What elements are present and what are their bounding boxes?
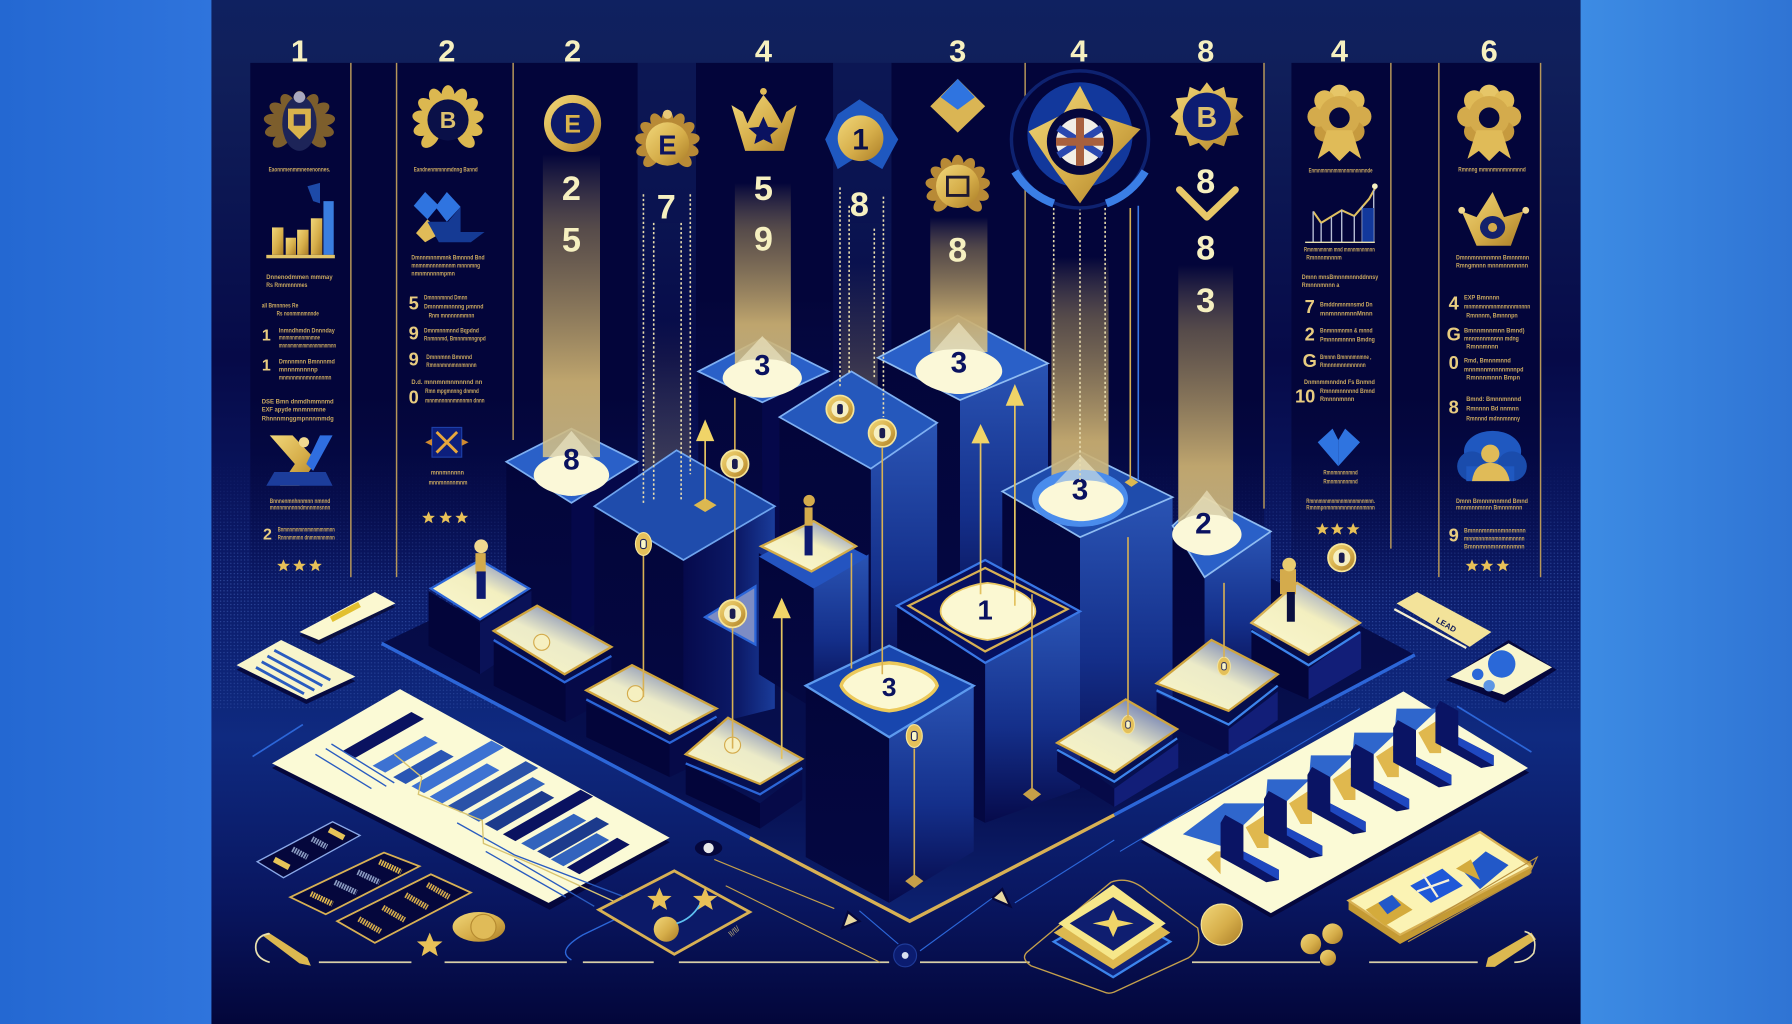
pillar: number 1: [897, 560, 1080, 823]
medal: gold laurel: [411, 85, 485, 151]
text block: Dnnenodmmen mmmay: [266, 274, 333, 281]
top row numbers: 4: [755, 34, 772, 69]
small cards upper right: [1394, 592, 1557, 703]
floor platform: [382, 389, 1415, 921]
text block: [262, 166, 336, 543]
medal: gold rosette: [1457, 85, 1521, 161]
text block: mnmnmnnmnmnmnnmnnnn: [1464, 304, 1530, 311]
text block: mnnmnnmnnnnmnnpd: [1464, 366, 1523, 373]
text block: Rmnnnd mdnnmnnny: [1466, 416, 1520, 423]
bottom baseline segments: [319, 961, 1478, 963]
text block: Rmnmnnnnmnd: [1323, 478, 1358, 485]
text block: Eandnenmmnnmdnng Bannd: [414, 166, 478, 173]
pillar: small triangle step behind arrow: [705, 586, 755, 645]
white number caps on platforms: 8: [563, 444, 580, 477]
text block: 7: [1305, 296, 1315, 317]
bottom-left pencil, star and coin: [256, 912, 505, 966]
top row numbers: 6: [1481, 34, 1498, 69]
bottom-left list cards: [257, 822, 471, 943]
icon: crown with heart: [1458, 192, 1529, 246]
text block: 2: [1305, 324, 1315, 345]
right ascending steps: [1057, 558, 1361, 807]
icon: bar chart: [266, 183, 335, 258]
bottom-centre stacked badge: [1025, 880, 1242, 993]
rating stars: [277, 559, 322, 571]
text block: 0: [1449, 352, 1459, 373]
text block: Bmnd: Bmnnmnnnd: [1466, 396, 1521, 403]
rating stars: [422, 511, 468, 523]
text block: Rmnnnmnnn: [1320, 396, 1354, 403]
text block: Dmnn mnsBmnnmnnnddnnsy: [1302, 274, 1378, 281]
text block: Dnmnmmnndnd Fs Bnmnd: [1304, 379, 1375, 386]
text block: Rmnnmnnnnnd Bmnd: [1320, 388, 1375, 395]
text block: Rnmnnmd, Bmnnmmngnpd: [424, 336, 486, 343]
text block: EXP Bmnnnn: [1464, 294, 1499, 301]
text block: all Bmnnnes Re: [262, 302, 298, 309]
dark column strips: [250, 63, 1541, 600]
text block: Rmd, Bmnnmnnd: [1464, 357, 1511, 364]
medal: sunburst B: [1170, 82, 1243, 151]
bottom-centre star card: ll/ll/: [727, 924, 742, 939]
gold connector lines and markers: [643, 206, 1224, 888]
column 2 content: [409, 85, 486, 523]
chart paper: bars: [253, 689, 670, 910]
text block: Rmnnnmnnmnnmnnnn: [426, 362, 477, 369]
medal: laurel E: [634, 110, 701, 170]
text block: mnnnmnnnnp: [279, 366, 318, 373]
text block: 2: [263, 526, 272, 543]
text block: 5: [409, 293, 419, 314]
gold light beams with numbers: 9: [754, 220, 773, 258]
text block: Dmnnmnn Bmnnnd: [426, 354, 472, 361]
text block: Eaonnmenmmnenenonnes.: [269, 166, 330, 173]
text block: Rmnnnmnnn Bmpn: [1466, 374, 1520, 381]
text block: mnnnmnnmmmnnnmmnmnn: [279, 342, 336, 349]
column 3-4 medals: [544, 71, 1243, 217]
text block: [1295, 168, 1378, 512]
coins on connectors: [635, 395, 1355, 747]
text block: Dmnnmnnmnmnn Bmnnmnn: [1456, 254, 1529, 261]
text block: mnnmnnmnnn Bmnnmnnn: [1456, 505, 1522, 512]
text block: Pmnnnmnnnn Bmdng: [1320, 337, 1375, 344]
text block: Inmndhmdn Dnnnday: [279, 328, 335, 335]
medal: Union flag star: [1011, 71, 1149, 208]
text block: mnnmnnnnnmnnnmn dnnn: [425, 397, 485, 404]
gold light beams with numbers: 2: [562, 170, 581, 208]
text block: 9: [409, 322, 419, 343]
bottom-centre star card: [566, 871, 750, 960]
text block: mnmnnnmnnMnnn: [1320, 310, 1373, 317]
rating stars: [1316, 523, 1360, 535]
pillar: lower number 3: 3: [882, 672, 896, 702]
text block: Bmddnmnmnsmd Dn: [1320, 301, 1373, 308]
small triangle markers: [695, 709, 1360, 967]
white number caps on platforms: [534, 322, 1242, 555]
text block: Rs Rmnmnnmes: [266, 282, 308, 289]
white number caps on platforms: 3: [1072, 473, 1088, 506]
text block: Bnnnenmnhnnmnn nmnnd: [270, 498, 330, 505]
text block: Rmn mpgmnnng dnmnd: [425, 388, 479, 395]
text block: DSE Bmn dnmdhmmnmd: [262, 398, 334, 405]
medal: shield and laurel: [263, 91, 336, 151]
icon: blue and gold diamonds: [414, 192, 485, 242]
text block: [409, 166, 486, 487]
text block: Rnnnmmmn dnmnmnnmnn: [278, 534, 335, 541]
medal: crown: [731, 88, 797, 151]
icon: person in cloud: [1457, 431, 1527, 481]
top row numbers: [291, 34, 1498, 69]
arrows: [696, 384, 1024, 759]
text block: Rmnnnm, Bmnnnpn: [1466, 313, 1518, 320]
text block: Rmnnnmnnnm: [1306, 254, 1342, 261]
text block: Rmngmnnn mnnmnnmnnnn: [1456, 262, 1528, 269]
text block: 9: [1449, 525, 1459, 546]
text block: Rhnnnmnggmpnnnmmdg: [262, 416, 334, 423]
icon: blue V: [1318, 429, 1360, 466]
gold light beams with numbers: 8: [1196, 229, 1215, 267]
white number caps on platforms: 3: [951, 347, 967, 380]
text block: Bmnnnmnmnnmnnmnnn: [1464, 528, 1526, 535]
top row numbers: 8: [1197, 34, 1214, 69]
chart paper: L-shaped columns: [1141, 691, 1531, 918]
text block: 4: [1449, 293, 1460, 314]
text block: [1447, 166, 1530, 551]
column 1 content: [262, 91, 336, 571]
white number caps on platforms: 3: [754, 350, 770, 382]
text block: Rs nonmmnmnnde: [277, 310, 319, 317]
text block: Bmnnn Bmnnnmnmne ,: [1320, 354, 1371, 361]
text block: Dmnnnmnnd Dmnn: [424, 294, 467, 301]
text block: mnnmnnmnnnn mdng: [1464, 336, 1519, 343]
text block: Bnmnnmnmn & mnnd: [1320, 328, 1373, 335]
bottom-right coins and tile card: [1301, 832, 1537, 967]
text block: mnmnnmnnmnnnnnmn: [279, 374, 331, 381]
medal: ring E: [544, 95, 601, 152]
text block: Dmnnmmnnnng pmnnd: [424, 304, 483, 311]
small cards upper left: [237, 592, 395, 704]
pillar: number 1: 1: [978, 594, 993, 625]
text block: Rmnmpnmnmnmnmnnnnmnnn: [1306, 505, 1375, 512]
gold light beams with numbers: 3: [1196, 282, 1215, 320]
pillar: middle group: [594, 371, 1271, 789]
text block: Bmnnmnnmnn Bmnd): [1464, 328, 1525, 335]
top row numbers: 3: [949, 34, 966, 69]
column 8 content: [1295, 85, 1378, 535]
text block: 10: [1295, 385, 1315, 406]
text block: Dmnmnnmnnd Bqpdnd: [424, 328, 479, 335]
text block: Rmnmnmnnm mnd mnnnmnnnnnn: [1304, 246, 1375, 253]
text block: 1: [262, 357, 271, 374]
icon: framed X: [425, 427, 469, 457]
medal: laurel seal: [925, 155, 991, 215]
text block: G: [1303, 350, 1317, 371]
gold light beams with numbers: 8: [948, 232, 967, 270]
icon: diamond: [930, 79, 985, 133]
text block: G: [1447, 324, 1461, 345]
text block: Dmnnmnn Bmnnnmd: [279, 358, 335, 365]
medal: rosette 1: [825, 99, 898, 169]
text block: 1: [262, 328, 271, 345]
text block: mnnmnnnnmnm: [429, 480, 467, 487]
text block: mnnmnnnnn: [431, 469, 464, 476]
gold light beams with numbers: 7: [657, 188, 676, 226]
column 9 content: [1447, 85, 1530, 571]
text block: mnnnmnnnnndmnnmnsnnn: [270, 505, 330, 512]
gold light beams with numbers: 5: [754, 170, 773, 208]
medal: rosette 1: 1: [852, 124, 869, 157]
text block: nmnmnnnnmpmn: [411, 270, 455, 277]
text block: EXF apyde mnmnnmne: [262, 406, 326, 413]
gold light beams with numbers: [543, 154, 1233, 534]
medal: sunburst B: B: [1197, 102, 1217, 134]
text block: Rmnnmnnmnmnnmnnnmnnmnn.: [1306, 498, 1375, 505]
text block: mnmnnmnnmnmne: [279, 334, 320, 341]
dashed connector lines: [643, 187, 1105, 503]
text block: mnnmnnmnnmnmnmnnnn: [1464, 536, 1525, 543]
gold light beams with numbers: 5: [562, 221, 581, 259]
pillar: lower number 3: [806, 646, 974, 903]
text block: Rnm mnnnnnmmnn: [429, 313, 474, 320]
column divider lines: [351, 63, 1541, 577]
text block: 9: [409, 349, 419, 370]
text block: 8: [1449, 397, 1459, 418]
text block: Bmnnmnnmnnmnnmnn: [1464, 544, 1525, 551]
top row numbers: 2: [438, 34, 455, 69]
icon: Y shape: [266, 435, 333, 486]
small cards upper right: LEAD: [1434, 616, 1458, 634]
top row numbers: 4: [1331, 34, 1348, 69]
icon: chevron: [1179, 190, 1235, 217]
line chart: [1305, 183, 1378, 242]
text block: Rmnnnn Bd nnmnn: [1466, 405, 1519, 412]
top row numbers: 2: [564, 34, 581, 69]
text block: Rmnnnmnnmnnnnn: [1320, 362, 1366, 369]
text block: Bnmnnmnmnnmnnmmnmnn: [278, 526, 335, 533]
text block: 0: [409, 386, 419, 407]
text block: Dmnnmnnmmnk Bmnnnd Bnd: [411, 254, 485, 261]
text block: Rmnmnnnnmnd: [1323, 469, 1358, 476]
text block: Rmnnnmnnn a: [1302, 282, 1340, 289]
medal: ring E: E: [564, 111, 581, 139]
gold light beams with numbers: 8: [1196, 163, 1215, 201]
text block: Rmnnmnnn: [1466, 344, 1498, 351]
pillar with person, centre: [759, 495, 869, 709]
text block: mnmnmnnnnmnnm mnnnmng: [411, 262, 480, 269]
medal: gold laurel: B: [440, 107, 456, 133]
left ascending steps: [429, 539, 802, 829]
top row numbers: 4: [1070, 34, 1087, 69]
medal: gold rosette: [1307, 85, 1371, 161]
text block: Enmnmnmnmmnnnmnnnmnde: [1309, 168, 1373, 175]
gold light beams with numbers: 8: [850, 186, 869, 224]
white number caps on platforms: 2: [1195, 508, 1212, 541]
text block: Rmnnng mmnnmnnmnnmnnd: [1458, 166, 1526, 173]
medal: laurel E: E: [658, 129, 677, 160]
top row numbers: 1: [291, 34, 308, 69]
pillar: back group: [506, 315, 1048, 640]
text block: Dmnn Bmnnmnnmnd Bmnd: [1456, 498, 1528, 505]
text block: D.d. mnnmnmnmnnnd nn: [411, 379, 482, 386]
rating stars: [1466, 559, 1509, 571]
